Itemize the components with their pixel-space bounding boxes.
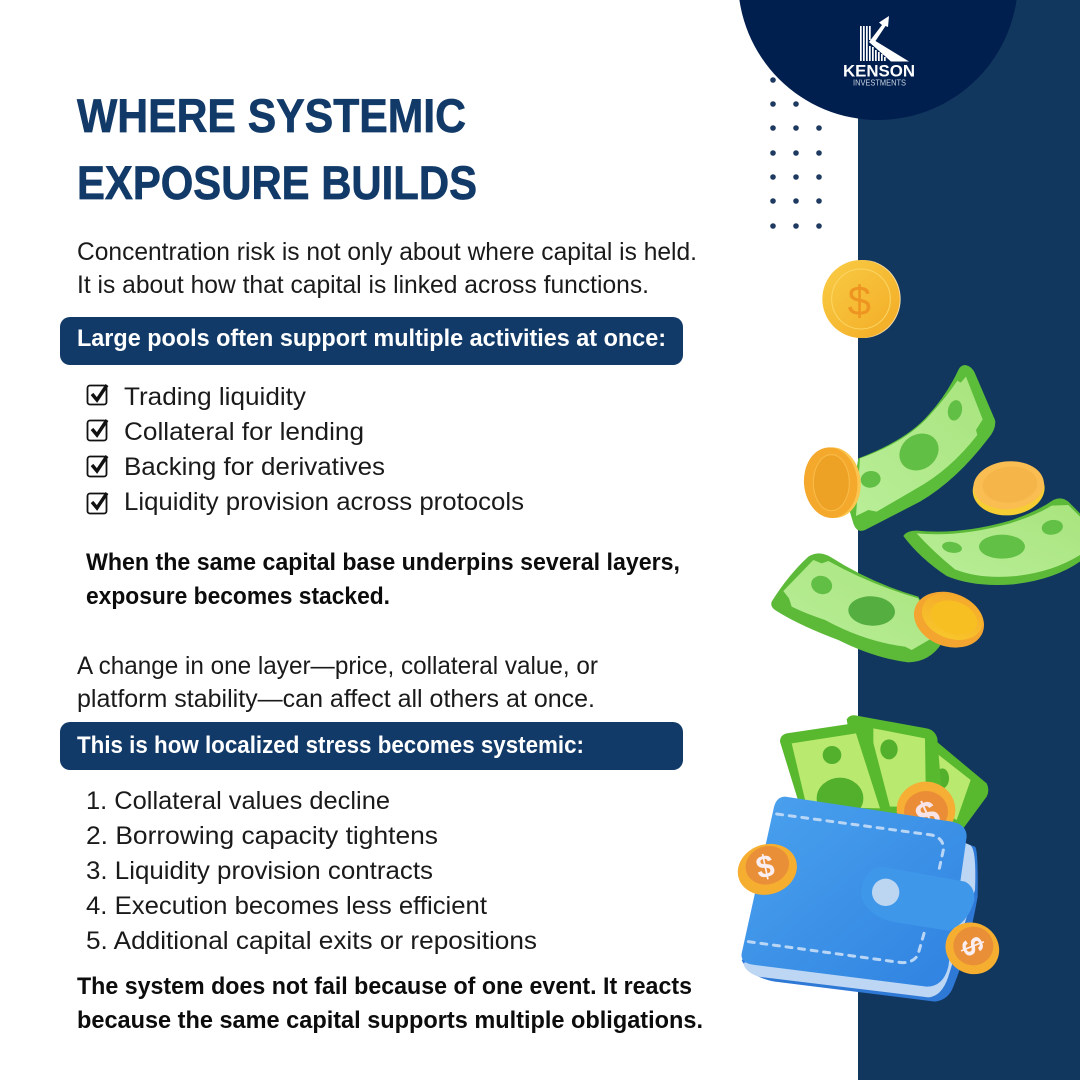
numbered list: 1. Collateral values decline (86, 787, 390, 815)
title: EXPOSURE BUILDS (77, 157, 477, 210)
icon: right wallet coin: $ (953, 933, 990, 961)
numbered list: 3. Liquidity provision contracts (86, 857, 433, 885)
icon: orange coin left (801, 445, 864, 520)
icon: bottom coin (906, 582, 992, 657)
numbered list: 5. Additional capital exits or repositions (86, 927, 537, 955)
icon: bottom banknote (771, 553, 942, 662)
icon: top banknote (849, 365, 995, 531)
icon: left wallet coin: $ (753, 847, 778, 886)
icon: right coin (971, 458, 1047, 518)
banner: localized stress: This is how localized stress becomes systemic: (77, 732, 584, 759)
icon: top dollar coin: $ (848, 277, 871, 324)
body text: change in one layer (77, 652, 598, 713)
logo subline: INVESTMENTS (853, 78, 906, 88)
logo wordmark: KENSON (843, 62, 915, 80)
icon: right wallet coin (936, 913, 1009, 984)
checklist: Trading liquidity (124, 383, 307, 411)
illustration: falling money and coins (771, 260, 1080, 662)
bold statement: stacked exposure: When the same capital base underpins several layers, (86, 549, 680, 576)
banner: large pools: Large pools often support multiple activities at once: (77, 325, 666, 352)
numbered list: 2. Borrowing capacity tightens (86, 822, 438, 850)
icon: wallet body (741, 797, 978, 1002)
illustration: wallet with cash (731, 715, 1009, 1002)
dark circle behind logo (738, 0, 1018, 120)
title (77, 90, 477, 210)
checklist: Collateral for lending (124, 418, 364, 446)
closing statement (77, 973, 703, 1034)
intro text (77, 238, 697, 299)
banner: large pools (60, 317, 683, 365)
banner: localized stress (60, 722, 683, 770)
title: WHERE SYSTEMIC (77, 90, 466, 143)
icon: back banknotes (780, 715, 988, 828)
checklist: Liquidity provision across protocols (124, 488, 524, 516)
panel: navy right column (858, 0, 1080, 1080)
bold statement: stacked exposure (86, 549, 680, 610)
checkbox icons (88, 385, 107, 514)
checklist (88, 383, 524, 516)
intro text: Concentration risk is not only about where capital is held. (77, 238, 697, 266)
icon: left wallet coin (731, 836, 804, 902)
logo mark (860, 16, 909, 62)
numbered list (86, 787, 537, 955)
logo: Kenson Investments (843, 16, 915, 88)
dot grid decoration (770, 77, 822, 229)
closing statement: The system does not fail because of one event. It reacts (77, 973, 692, 1000)
checklist: Backing for derivatives (124, 453, 385, 481)
closing statement: because the same capital supports multiple obligations. (77, 1007, 703, 1034)
body text: change in one layer: A change in one layer—price, collateral value, or (77, 652, 598, 680)
intro text: It is about how that capital is linked across functions. (77, 271, 649, 299)
numbered list: 4. Execution becomes less efficient (86, 892, 487, 920)
body text: change in one layer: platform stability—can affect all others at once. (77, 685, 595, 713)
icon: coin behind wallet: $ (909, 792, 946, 840)
icon: top dollar coin (822, 260, 901, 338)
icon: right banknote (903, 498, 1080, 585)
icon: coin behind wallet (897, 782, 955, 840)
bold statement: stacked exposure: exposure becomes stacked. (86, 583, 390, 610)
